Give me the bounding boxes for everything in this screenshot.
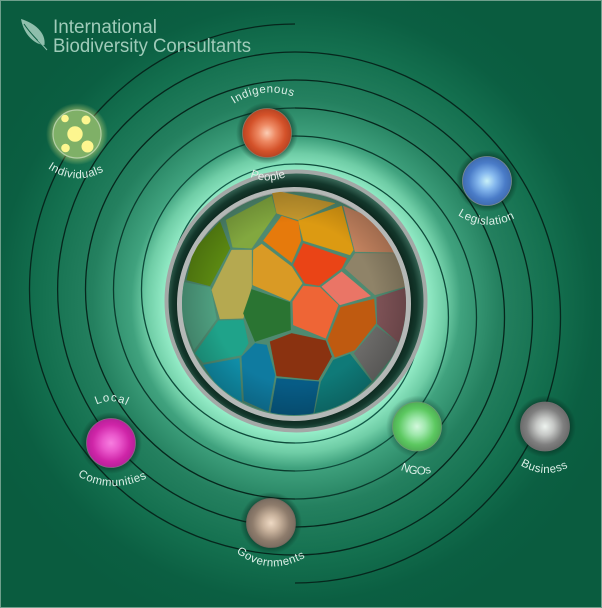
orb: Governments [240, 492, 302, 554]
label: Individuals: Individuals [48, 162, 103, 178]
labels [48, 86, 568, 566]
outer ring [166, 172, 426, 430]
orb: Local Communities [80, 412, 142, 474]
logo text: Biodiversity Consultants [53, 36, 251, 57]
label: Business: Business [521, 458, 568, 473]
label: Legislation: Legislation [458, 208, 514, 225]
label: Indigenous: Indigenous [230, 86, 294, 104]
orb: Indigenous [236, 102, 298, 164]
inner ring [180, 190, 408, 418]
label: People: People [251, 170, 285, 183]
label: NGOs: NGOs [401, 462, 431, 474]
orb: NGOs [386, 396, 448, 458]
label: Governments: Governments [238, 548, 304, 566]
label: Communities: Communities [79, 470, 146, 486]
orb: Business [514, 396, 576, 458]
orb: Individuals [46, 103, 108, 165]
orb: Legislation [456, 150, 518, 212]
central stained-glass disc [166, 172, 426, 430]
logo: International Biodiversity Consultants [21, 17, 251, 57]
label: Local: Local [94, 395, 130, 405]
voronoi cells [180, 190, 408, 417]
logo text: International [53, 17, 157, 38]
icon: leaf [21, 19, 47, 50]
